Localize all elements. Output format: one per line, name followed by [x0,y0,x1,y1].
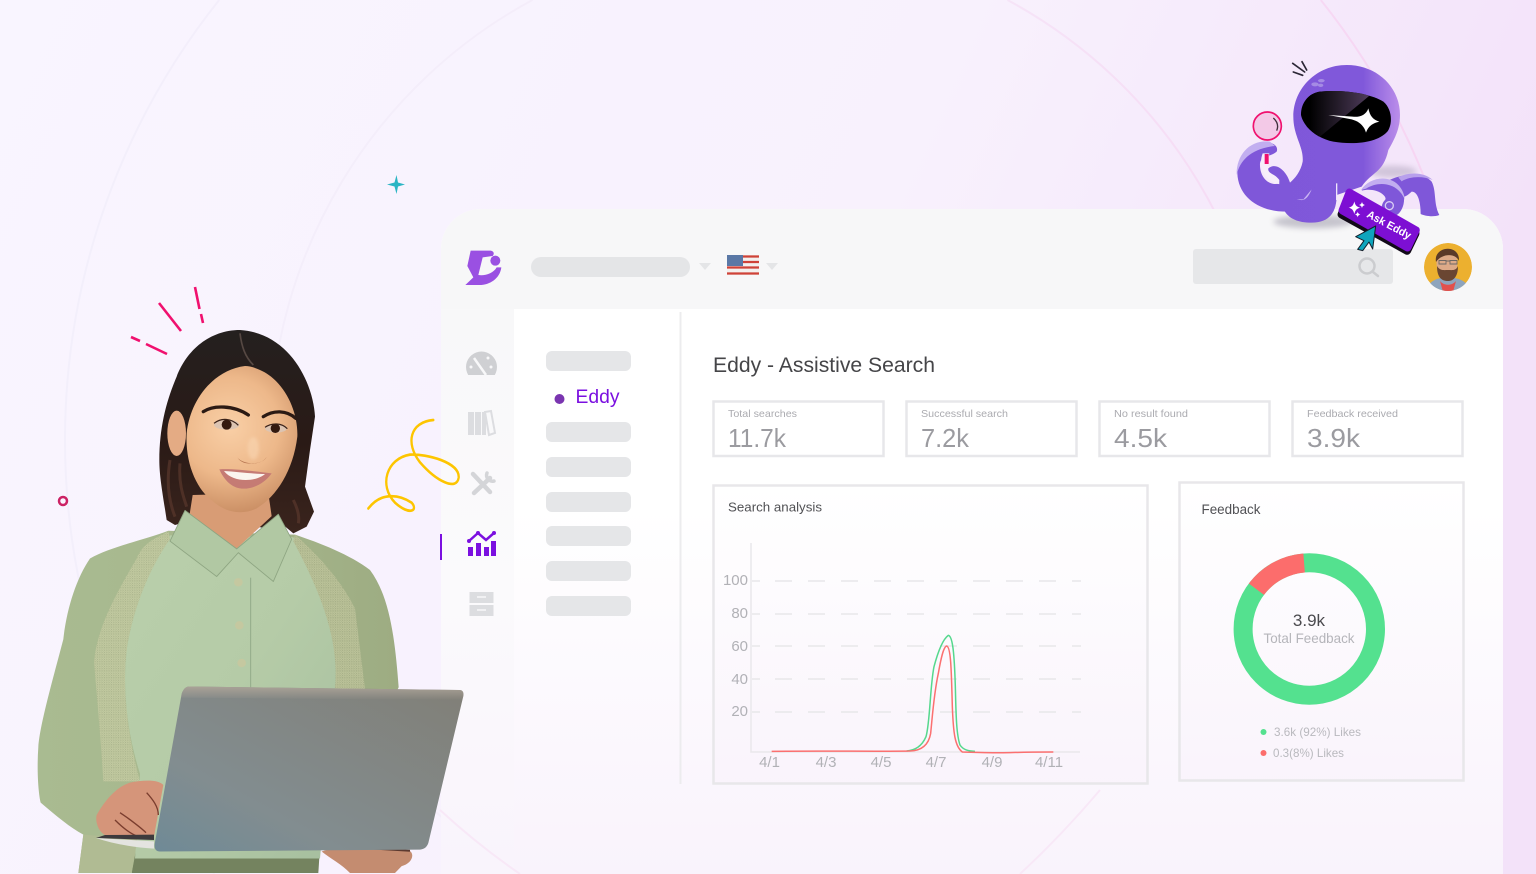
left tentacle [1237,142,1297,212]
legend: 0.3(8%) Likes [1273,746,1344,760]
panel: search analysis chart [714,486,1148,784]
stat: successful search: 7.2k [921,423,970,453]
sidebar icon: analytics [467,531,496,556]
sidebar icon: cabinet [470,592,494,616]
faint rings inside the card [440,790,1100,874]
collar [170,510,292,582]
y axis labels: 60 [731,638,748,655]
nose [237,457,267,463]
axes [751,543,1080,752]
stat: no result found [1100,402,1270,456]
chevron [766,263,778,270]
sidebar icon: tools [473,473,494,493]
y axis labels [723,572,748,720]
menu item: Eddy [554,387,620,408]
x axis labels: 4/9 [982,754,1002,771]
secondary menu [546,351,631,616]
hair [159,330,315,533]
face [187,366,297,512]
sparkle: teal [387,175,405,194]
shadow [1273,215,1353,228]
motion marks [1293,62,1307,75]
stat: no result found: No result found [1114,408,1188,420]
chevron [699,263,711,270]
active marker [440,534,442,560]
green line [772,635,1053,753]
x axis labels: 4/7 [926,754,946,771]
head spots [1311,79,1325,87]
shirt [125,535,337,858]
header pill [531,257,690,277]
sidebar icon: gauge [466,352,497,375]
Ask Eddy badge: Ask Eddy [1365,209,1414,242]
front right tentacle [1362,179,1404,217]
stat: feedback received: Feedback received [1307,408,1398,420]
stat: successful search: Successful search [921,408,1008,420]
donut chart [1243,563,1376,695]
logo [465,251,501,285]
flag [727,255,759,275]
Ask Eddy badge [1338,188,1420,255]
pink rays [131,287,203,354]
ear [167,411,186,456]
top bar [441,209,1503,309]
red line [772,646,1053,753]
neck [189,493,272,548]
yellow squiggle [368,420,459,511]
grid lines [775,581,1081,712]
legend [1260,725,1361,760]
x axis labels [759,754,1063,771]
chart heading: Search analysis [728,500,822,514]
visor star [1328,108,1379,133]
body [1268,65,1400,223]
y axis labels: 20 [731,703,748,720]
sidebar [441,309,514,874]
y axis labels: 100 [723,572,748,589]
page heading: Eddy - Assistive Search [713,354,935,377]
sidebar icon: books [468,411,495,435]
back right tentacle [1387,175,1439,216]
cursor [1356,226,1376,251]
cardigan left band [94,532,170,782]
head [167,366,297,512]
feedback heading: Feedback [1202,502,1261,517]
stat: feedback received: 3.9k [1307,423,1361,453]
panel: feedback donut [1180,482,1464,780]
cardigan right band [293,535,365,689]
stat: feedback received [1292,402,1462,456]
stat: total searches: 11.7k [728,423,787,453]
laptop lid [155,687,463,852]
legend: 3.6k (92%) Likes [1274,725,1361,739]
trousers [132,847,320,873]
avatar [1424,243,1472,292]
ring: pink dot [59,497,67,505]
x axis labels: 4/1 [759,754,780,771]
stat: total searches: Total searches [728,408,797,420]
card base [441,209,1503,874]
eyes [214,419,287,433]
stat: no result found: 4.5k [1114,423,1168,453]
search box [1193,249,1393,284]
x axis labels: 4/3 [816,754,836,771]
cardigan lower band [78,835,137,873]
donut centre text: 3.9k [1293,611,1326,630]
stat: successful search [906,402,1076,456]
placket and buttons [234,578,251,687]
x axis labels: 4/5 [871,754,891,771]
panel: feedback donut: Total Feedback [1264,630,1355,646]
left hand and laptop base [96,781,163,849]
y axis labels: 40 [731,671,748,688]
y axis labels: 80 [731,605,748,622]
right hand [322,846,412,873]
bubble [1253,112,1281,140]
eyebrows [203,407,296,418]
x axis labels: 4/11 [1035,754,1063,771]
stat: total searches [714,402,884,456]
mouth [219,469,272,489]
menu item: Eddy: Eddy [576,387,620,408]
cardigan [38,531,399,873]
woman with laptop [38,330,463,873]
visor [1301,91,1391,144]
octopus mascot [1237,62,1439,255]
